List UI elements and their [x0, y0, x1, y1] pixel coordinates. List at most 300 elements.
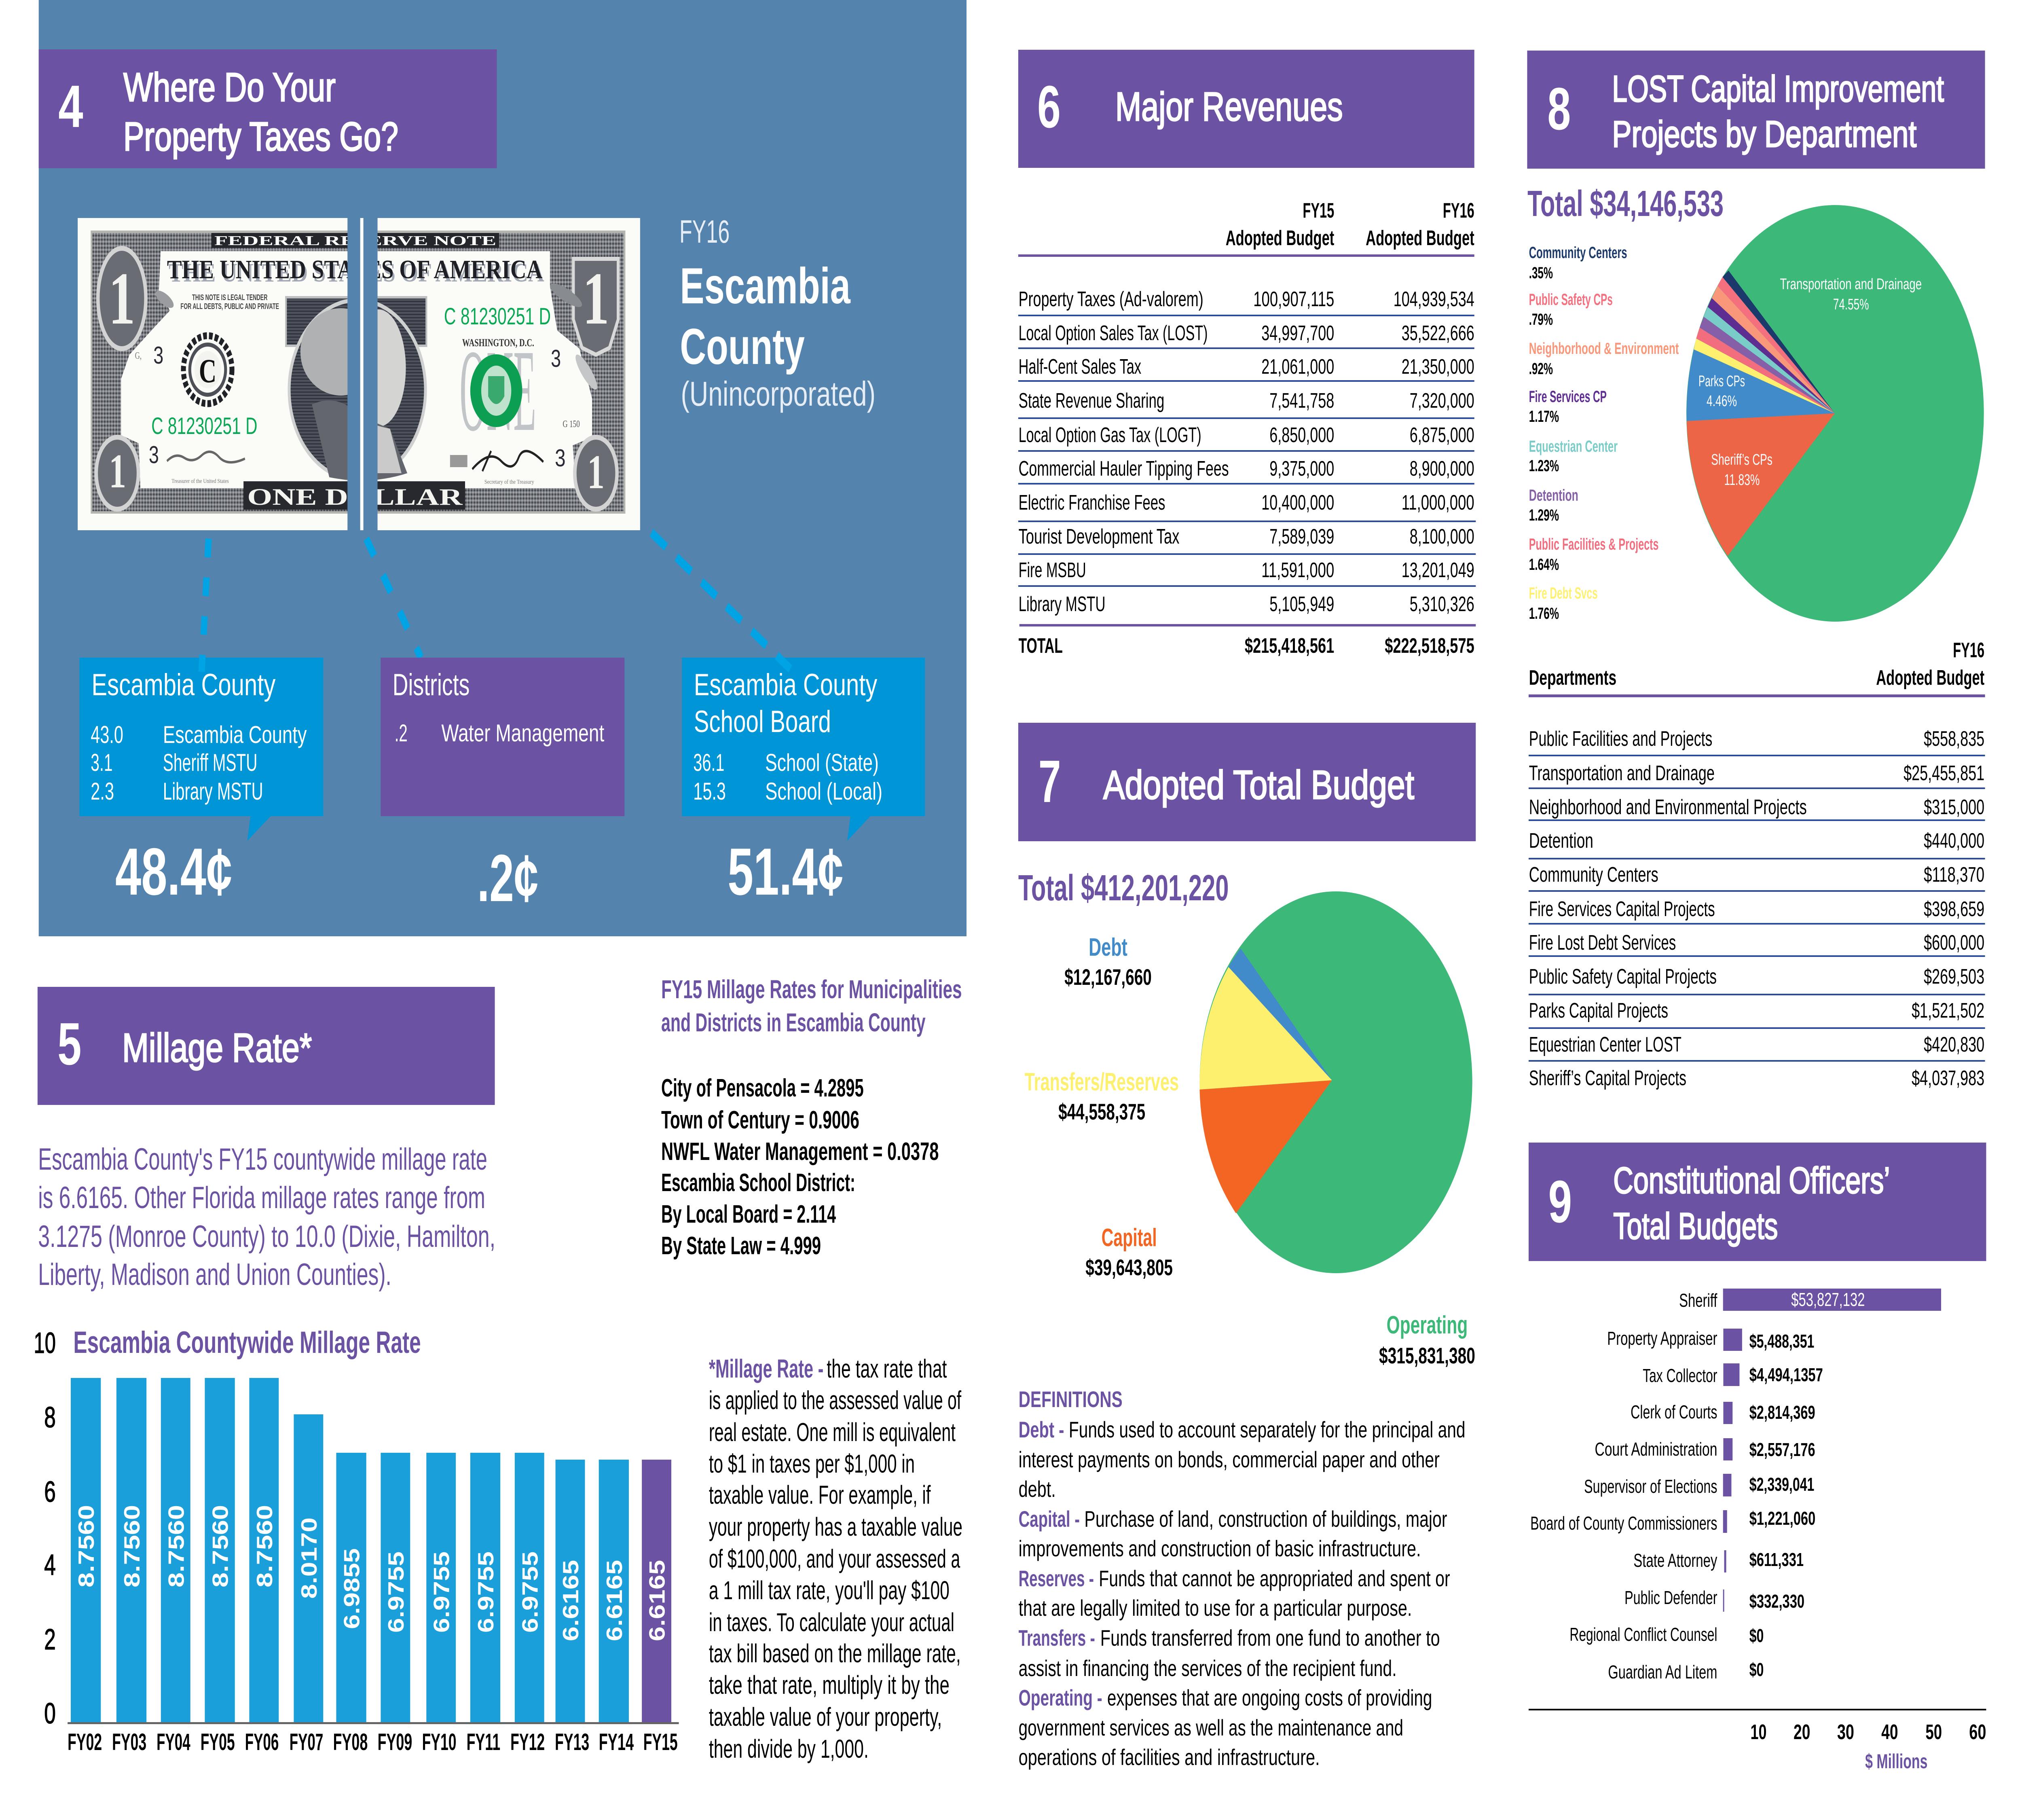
- pie labels: adopted total budget: $315,831,380: [1379, 1344, 1475, 1369]
- text block: millage rate definition: a 1 mill tax rate, you'll pay $100: [709, 1576, 950, 1605]
- text block: definitions: Transfers -: [1019, 1626, 1095, 1651]
- legend: LOST departments: Community Centers: [1529, 244, 1627, 262]
- table rows: $558,835: [1924, 727, 1984, 751]
- heading: section 7 adopted total budget: Adopted Total Budget: [1103, 762, 1414, 808]
- callout: Escambia County: Library MSTU: [163, 778, 263, 805]
- text block: FY15 municipal millage rates: City of Pensacola = 4.2895: [661, 1074, 864, 1102]
- seal: Federal Reserve: C: [199, 352, 216, 389]
- callout: Escambia County: Escambia County: [163, 722, 307, 749]
- table header: FY15: [1303, 199, 1334, 222]
- legend: LOST departments: .35%: [1529, 264, 1553, 282]
- table rows: Property Taxes (Ad-valorem): [1019, 287, 1203, 311]
- text block: FY15 municipal millage rates: Town of Century = 0.9006: [661, 1106, 859, 1134]
- table rows: 10,400,000: [1261, 491, 1334, 514]
- row labels: Guardian Ad Litem: [1608, 1662, 1717, 1682]
- x axis labels: FY08: [333, 1729, 368, 1755]
- table rows: State Revenue Sharing: [1019, 389, 1164, 413]
- text block: millage intro: is 6.6165. Other Florida millage rates range from: [38, 1180, 485, 1215]
- bar values: $332,330: [1749, 1591, 1804, 1612]
- illustration: split one dollar bill: 3: [555, 445, 566, 472]
- text block: definitions: DEFINITIONS: [1019, 1387, 1123, 1412]
- illustration: split one dollar bill: 1: [583, 257, 609, 340]
- table rows: $4,037,983: [1912, 1066, 1984, 1090]
- legend: LOST departments: Neighborhood & Environment: [1529, 340, 1679, 358]
- callout: Districts: .2: [395, 720, 408, 747]
- text block: definitions: Debt -: [1019, 1418, 1064, 1443]
- y axis labels: 8: [44, 1401, 56, 1434]
- text block: definitions: Reserves -: [1019, 1566, 1094, 1591]
- y axis labels: 2: [44, 1623, 56, 1656]
- text block: FY15 municipal millage rates: and Districts in Escambia County: [661, 1008, 926, 1037]
- illustration: split one dollar bill: 3: [551, 345, 561, 372]
- callout: Escambia County School Board: School (State): [765, 749, 879, 777]
- text block: FY16 Escambia County: County: [680, 319, 805, 375]
- x axis labels: FY03: [112, 1729, 146, 1755]
- x axis labels: FY07: [290, 1729, 323, 1755]
- table rows: [1529, 727, 1984, 1090]
- chart title: Escambia Countywide Millage Rate: Escambia Countywide Millage Rate: [73, 1325, 421, 1359]
- table rows: Library MSTU: [1019, 592, 1106, 616]
- table rows: $118,370: [1924, 863, 1984, 887]
- illustration: split one dollar bill: FOR ALL DEBTS, PUBLIC AND PRIVATE: [180, 302, 279, 311]
- table: LOST departments: [1529, 638, 1985, 1090]
- heading: section 8 LOST capital improvement: 8: [1547, 76, 1571, 142]
- text block: millage intro: Liberty, Madison and Union Counties).: [38, 1257, 391, 1291]
- legend: LOST departments: Fire Debt Svcs: [1529, 584, 1598, 602]
- table rows: 21,061,000: [1261, 355, 1334, 379]
- bar values: $53,827,132: [1791, 1290, 1865, 1310]
- bar value labels: 6.6165: [645, 1560, 669, 1641]
- pie labels: adopted total budget: [1025, 933, 1475, 1369]
- table rows: Fire Lost Debt Services: [1529, 931, 1676, 954]
- pie labels: 4.46%: [1707, 392, 1737, 409]
- callout: Escambia County School Board: 15.3: [693, 778, 726, 805]
- text block: definitions: government services as well as the maintenance and: [1019, 1716, 1403, 1741]
- value: 48.4 cents: 48.4¢: [115, 835, 232, 909]
- pie chart: adopted total budget: [1199, 891, 1472, 1273]
- table rows: 7,589,039: [1269, 525, 1334, 548]
- text block: millage intro: [38, 1142, 495, 1291]
- bar value labels: [74, 1505, 669, 1641]
- heading: section 5 millage rate: Millage Rate*: [122, 1025, 312, 1071]
- text block: millage rate definition: take that rate, multiply it by the: [709, 1670, 950, 1699]
- bars: [1723, 1289, 1941, 1612]
- table rows: $420,830: [1924, 1033, 1984, 1056]
- illustration: split one dollar bill: Treasurer of the United States: [171, 477, 229, 484]
- callout: Escambia County: 2.3: [91, 778, 114, 805]
- axis ticks: [1751, 1720, 1986, 1744]
- illustration: split one dollar bill: G,: [135, 350, 142, 361]
- table rows: 6,850,000: [1269, 423, 1334, 447]
- table rows: 9,375,000: [1269, 457, 1334, 480]
- table rows: $222,518,575: [1385, 634, 1474, 658]
- heading: section 7 adopted total budget: [1018, 723, 1476, 841]
- illustration: split one dollar bill: Secretary of the Treasury: [484, 478, 534, 485]
- illustration: split one dollar bill: 1: [108, 257, 135, 340]
- illustration: split one dollar bill: 1: [109, 444, 126, 498]
- table rows: Detention: [1529, 829, 1593, 853]
- heading: section 9 constitutional officers: Constitutional Officers’: [1613, 1160, 1890, 1201]
- table rows: 7,320,000: [1410, 389, 1474, 413]
- x axis labels: FY11: [467, 1729, 500, 1755]
- x axis labels: FY02: [68, 1729, 102, 1755]
- text block: FY15 municipal millage rates: NWFL Water Management = 0.0378: [661, 1138, 939, 1166]
- table rows: $440,000: [1924, 829, 1984, 853]
- text block: millage intro: Escambia County's FY15 countywide millage rate: [38, 1142, 487, 1176]
- text block: definitions: Purchase of land, construction of buildings, major: [1084, 1507, 1447, 1532]
- table rows: $1,521,502: [1912, 999, 1984, 1022]
- pie labels: adopted total budget: Debt: [1089, 933, 1127, 961]
- row labels: Public Defender: [1624, 1588, 1717, 1608]
- bar value labels: 8.7560: [120, 1505, 144, 1587]
- bars: [71, 1378, 671, 1723]
- text block: FY15 municipal millage rates: By State Law = 4.999: [661, 1232, 821, 1260]
- illustration: split one dollar bill: ONE: [459, 325, 536, 455]
- table rows: 11,000,000: [1402, 491, 1474, 514]
- table rows: $269,503: [1924, 965, 1984, 988]
- illustration: split one dollar bill: THIS NOTE IS LEGAL TENDER: [192, 293, 268, 302]
- y axis labels: 4: [44, 1549, 56, 1581]
- illustration: split one dollar bill: FEDERAL RESERVE NOTE: [214, 233, 496, 248]
- bar values: [1749, 1290, 1865, 1680]
- heading: section 8 LOST capital improvement: Projects by Department: [1612, 113, 1916, 155]
- table rows: 7,541,758: [1269, 389, 1334, 413]
- pie labels: 11.83%: [1724, 471, 1760, 488]
- illustration: split one dollar bill: C 81230251 D: [444, 303, 551, 330]
- text block: millage rate definition: taxable value. For example, if: [709, 1480, 931, 1509]
- callout: Escambia County School Board: School (Local): [765, 778, 882, 805]
- table rows: 34,997,700: [1261, 321, 1334, 345]
- text block: FY16 Escambia County: [679, 214, 876, 413]
- total: adopted budget: Total $412,201,220: [1018, 867, 1229, 908]
- bar value labels: 8.7560: [252, 1505, 277, 1587]
- pie labels: adopted total budget: Transfers/Reserves: [1025, 1068, 1179, 1096]
- callout: Districts: Districts: [393, 667, 470, 702]
- text block: FY15 municipal millage rates: Escambia School District:: [661, 1169, 855, 1197]
- y axis labels: 6: [44, 1476, 56, 1508]
- text block: FY16 Escambia County: Escambia: [680, 258, 851, 315]
- callout: Escambia County: 43.0: [91, 722, 123, 749]
- value: .2 cents: .2¢: [477, 841, 538, 916]
- table rows: $215,418,561: [1245, 634, 1334, 658]
- row labels: Sheriff: [1679, 1291, 1717, 1311]
- illustration: split one dollar bill: 3: [149, 442, 159, 469]
- bar chart: constitutional officers budgets: [1529, 1289, 1986, 1773]
- axis ticks: 30: [1837, 1720, 1854, 1744]
- panel: where do your property taxes go: [39, 0, 967, 936]
- text block: definitions: improvements and construction of basic infrastructure.: [1019, 1536, 1421, 1562]
- illustration: split one dollar bill: [78, 218, 640, 530]
- x axis labels: FY13: [555, 1729, 589, 1755]
- heading: section 9 constitutional officers: 9: [1548, 1169, 1572, 1235]
- bar value labels: 6.6165: [602, 1560, 626, 1641]
- text block: definitions: Funds that cannot be appropriated and spent or: [1099, 1566, 1450, 1591]
- text block: millage rate definition: the tax rate that: [827, 1354, 947, 1383]
- heading: section 6 major revenues: [1018, 50, 1474, 168]
- callout: Escambia County: 3.1: [91, 749, 113, 777]
- table rows: 11,591,000: [1261, 558, 1334, 582]
- table rows: 13,201,049: [1402, 558, 1474, 582]
- pie labels: adopted total budget: $12,167,660: [1064, 965, 1152, 990]
- bar values: $4,494,1357: [1749, 1365, 1823, 1385]
- callout: Escambia County: Escambia County: [91, 667, 275, 702]
- table rows: Tourist Development Tax: [1019, 525, 1180, 548]
- callout: Escambia County School Board: 36.1: [693, 749, 724, 777]
- heading: section 9 constitutional officers: [1529, 1143, 1986, 1261]
- table rows: Public Facilities and Projects: [1529, 727, 1712, 751]
- callout: Escambia County School Board: [682, 658, 925, 841]
- x axis labels: FY10: [422, 1729, 457, 1755]
- bar value labels: 6.9755: [518, 1551, 542, 1633]
- x axis labels: FY15: [643, 1729, 678, 1755]
- table rows: Fire Services Capital Projects: [1529, 897, 1715, 921]
- text block: definitions: that are legally limited to use for a particular purpose.: [1019, 1596, 1412, 1621]
- bar values: $2,339,041: [1749, 1475, 1814, 1495]
- arrow: dashed line to Escambia County: [202, 539, 209, 672]
- table rows: 100,907,115: [1253, 287, 1334, 311]
- heading: section 4: Property Taxes Go?: [123, 114, 398, 159]
- text block: FY15 municipal millage rates: [661, 975, 962, 1260]
- bar values: $0: [1749, 1626, 1764, 1646]
- text block: millage rate definition: tax bill based on the millage rate,: [709, 1639, 961, 1668]
- callout: Districts: [381, 658, 624, 816]
- table rows: Parks Capital Projects: [1529, 999, 1668, 1022]
- text block: millage rate definition: *Millage Rate -: [709, 1354, 823, 1383]
- illustration: split one dollar bill: 3: [153, 342, 163, 369]
- table rows: Equestrian Center LOST: [1529, 1033, 1681, 1056]
- table rows: [1019, 287, 1474, 658]
- table rows: 104,939,534: [1394, 287, 1474, 311]
- x axis labels: FY14: [599, 1729, 634, 1755]
- illustration: split one dollar bill: G 150: [563, 418, 580, 430]
- pie labels: Sheriff’s CPs: [1711, 451, 1772, 468]
- illustration: split one dollar bill: C 81230251 D: [151, 413, 257, 439]
- table header: Adopted Budget: [1226, 226, 1334, 250]
- legend: LOST departments: .92%: [1529, 360, 1553, 378]
- table header: FY16: [1443, 199, 1474, 222]
- illustration: split one dollar bill: THE UNITED STATES OF AMERICA: [169, 258, 544, 288]
- text block: definitions: interest payments on bonds, commercial paper and other: [1019, 1448, 1440, 1473]
- text block: millage rate definition: real estate. One mill is equivalent: [709, 1418, 956, 1447]
- legend: LOST departments: 1.17%: [1529, 408, 1559, 425]
- table rows: Commercial Hauler Tipping Fees: [1019, 457, 1229, 480]
- seal: Treasury: [470, 354, 522, 427]
- axis ticks: 20: [1794, 1720, 1810, 1744]
- text block: definitions: Funds used to account separately for the principal and: [1069, 1418, 1466, 1443]
- row labels: Tax Collector: [1643, 1366, 1717, 1386]
- table rows: Fire MSBU: [1019, 558, 1086, 582]
- y axis labels: 10: [34, 1327, 56, 1359]
- bar values: $611,331: [1749, 1550, 1804, 1570]
- heading: section 6 major revenues: 6: [1037, 74, 1061, 140]
- legend: LOST departments: 1.29%: [1529, 506, 1559, 524]
- bar value labels: 8.7560: [74, 1505, 99, 1587]
- table header: FY16: [1953, 638, 1984, 662]
- callout: Escambia County School Board: School Board: [694, 704, 831, 739]
- axis unit label: $ Millions: [1865, 1750, 1927, 1773]
- text block: millage rate definition: in taxes. To calculate your actual: [709, 1608, 954, 1637]
- pie labels: adopted total budget: $44,558,375: [1058, 1100, 1145, 1125]
- table rows: Sheriff’s Capital Projects: [1529, 1066, 1686, 1090]
- table rows: $315,000: [1924, 795, 1984, 819]
- text block: FY16 Escambia County: (Unincorporated): [681, 375, 876, 413]
- bar chart: countywide millage rate: [34, 1327, 679, 1755]
- text block: definitions: expenses that are ongoing costs of providing: [1107, 1686, 1432, 1711]
- x axis labels: [68, 1729, 678, 1755]
- bar value labels: 6.9755: [429, 1551, 454, 1633]
- table rows: Community Centers: [1529, 863, 1658, 887]
- callout: Escambia County: Sheriff MSTU: [163, 749, 257, 777]
- bar value labels: 8.7560: [164, 1505, 188, 1587]
- row labels: [1530, 1291, 1717, 1682]
- divider: gap splitting the bill: [347, 218, 378, 532]
- table rows: Local Option Gas Tax (LOGT): [1019, 423, 1201, 447]
- value: 51.4 cents: 51.4¢: [728, 835, 844, 909]
- bar values: $1,221,060: [1749, 1509, 1815, 1529]
- table rows: Electric Franchise Fees: [1019, 491, 1165, 514]
- table rows: Public Safety Capital Projects: [1529, 965, 1717, 988]
- table header: [1018, 199, 1474, 257]
- text block: definitions: [1019, 1387, 1466, 1770]
- heading: section 4: [39, 49, 497, 168]
- table rows: Transportation and Drainage: [1529, 761, 1715, 785]
- bar value labels: 8.7560: [208, 1505, 233, 1587]
- x axis labels: FY12: [510, 1729, 545, 1755]
- portrait: George Washington: [286, 297, 426, 480]
- arrow: dashed line to School Board: [651, 533, 790, 669]
- bar values: $5,488,351: [1749, 1331, 1814, 1352]
- table rows: 21,350,000: [1402, 355, 1474, 379]
- row labels: Clerk of Courts: [1631, 1402, 1717, 1422]
- text block: millage rate definition: then divide by 1,000.: [709, 1734, 869, 1763]
- table header: [1529, 638, 1985, 697]
- text block: definitions: assist in financing the services of the recipient fund.: [1019, 1656, 1397, 1681]
- table header: Adopted Budget: [1876, 666, 1984, 690]
- heading: section 6 major revenues: Major Revenues: [1115, 84, 1343, 129]
- text block: FY15 municipal millage rates: By Local Board = 2.114: [661, 1200, 836, 1228]
- pie labels: adopted total budget: $39,643,805: [1085, 1255, 1173, 1280]
- text block: FY15 municipal millage rates: FY15 Millage Rates for Municipalities: [661, 975, 962, 1004]
- axis ticks: 50: [1925, 1720, 1942, 1744]
- legend: LOST departments: Detention: [1529, 487, 1578, 504]
- table rows: TOTAL: [1019, 634, 1063, 658]
- row labels: Court Administration: [1595, 1439, 1717, 1460]
- axis ticks: 40: [1881, 1720, 1898, 1744]
- legend: LOST departments: Fire Services CP: [1529, 388, 1607, 406]
- x axis labels: FY05: [201, 1729, 235, 1755]
- text block: FY16 Escambia County: FY16: [679, 214, 730, 250]
- heading: section 5 millage rate: [38, 987, 495, 1105]
- y axis labels: 0: [44, 1697, 56, 1730]
- table rows: 5,105,949: [1269, 592, 1334, 616]
- bar values: $0: [1749, 1660, 1764, 1680]
- heading: section 4: Where Do Your: [123, 65, 336, 110]
- pie labels: adopted total budget: Capital: [1102, 1224, 1157, 1252]
- table rows: 8,100,000: [1410, 525, 1474, 548]
- text block: millage rate definition: is applied to the assessed value of: [709, 1386, 962, 1415]
- axis ticks: 10: [1751, 1720, 1767, 1744]
- text block: millage rate definition: to $1 in taxes per $1,000 in: [709, 1449, 915, 1478]
- y axis labels: [34, 1327, 56, 1730]
- text block: definitions: Capital -: [1019, 1507, 1080, 1532]
- row labels: Regional Conflict Counsel: [1569, 1625, 1717, 1645]
- x axis labels: FY06: [245, 1729, 279, 1755]
- table header: Adopted Budget: [1366, 226, 1474, 250]
- table rows: $398,659: [1924, 897, 1984, 921]
- heading: section 4: 4: [58, 74, 83, 140]
- table rows: 8,900,000: [1410, 457, 1474, 480]
- legend: LOST departments: 1.64%: [1529, 556, 1559, 574]
- row labels: Supervisor of Elections: [1584, 1477, 1717, 1497]
- callout: Escambia County: [79, 658, 323, 841]
- heading: section 7 adopted total budget: 7: [1038, 749, 1061, 815]
- row labels: Property Appraiser: [1607, 1329, 1717, 1349]
- pie labels: [1698, 275, 1922, 488]
- bar values: $2,557,176: [1749, 1440, 1815, 1460]
- illustration: split one dollar bill: 1: [587, 445, 605, 499]
- legend: LOST departments: Public Facilities & Projects: [1529, 535, 1658, 553]
- text block: definitions: Operating -: [1019, 1686, 1102, 1711]
- text block: definitions: operations of facilities and infrastructure.: [1019, 1745, 1320, 1770]
- table rows: $25,455,851: [1904, 761, 1984, 785]
- pie chart: LOST capital projects: [1686, 205, 1984, 622]
- legend: LOST departments: 1.76%: [1529, 605, 1559, 622]
- x axis labels: FY09: [378, 1729, 412, 1755]
- legend: LOST departments: 1.23%: [1529, 457, 1559, 475]
- heading: section 8 LOST capital improvement: [1527, 51, 1985, 169]
- bar value labels: 6.9755: [384, 1551, 408, 1633]
- callout: Escambia County School Board: Escambia County: [694, 667, 877, 702]
- pie labels: Parks CPs: [1698, 372, 1745, 389]
- pie labels: Transportation and Drainage: [1780, 275, 1922, 292]
- row labels: State Attorney: [1633, 1551, 1717, 1571]
- table rows: 5,310,326: [1410, 592, 1474, 616]
- text block: millage rate definition: your property has a taxable value: [709, 1512, 962, 1541]
- arrow: dashed line to districts: [366, 539, 421, 658]
- text block: definitions: debt.: [1019, 1477, 1056, 1502]
- illustration: split one dollar bill: ONE DOLLAR: [247, 484, 463, 510]
- legend: LOST departments: Equestrian Center: [1529, 438, 1618, 455]
- illustration: split one dollar bill: WASHINGTON, D.C.: [462, 337, 534, 349]
- bar value labels: 6.9755: [474, 1551, 498, 1633]
- x axis labels: FY04: [157, 1729, 190, 1755]
- pie labels: 74.55%: [1833, 295, 1869, 313]
- bar value labels: 6.9855: [339, 1548, 364, 1629]
- illustration: split one dollar bill: THE UNITED STATES OF AMERICA: [167, 255, 542, 284]
- table rows: 35,522,666: [1402, 321, 1474, 345]
- heading: section 5 millage rate: 5: [57, 1011, 81, 1077]
- axis ticks: 60: [1969, 1720, 1986, 1744]
- text block: millage intro: 3.1275 (Monroe County) to 10.0 (Dixie, Hamilton,: [38, 1219, 495, 1253]
- text block: millage rate definition: [709, 1354, 962, 1763]
- table rows: 6,875,000: [1410, 423, 1474, 447]
- text block: millage rate definition: taxable value of your property,: [709, 1702, 942, 1731]
- legend: LOST departments: .79%: [1529, 311, 1553, 328]
- bar value labels: 8.0170: [297, 1517, 321, 1599]
- legend: LOST departments: Public Safety CPs: [1529, 291, 1613, 309]
- total: LOST capital: Total $34,146,533: [1527, 183, 1724, 224]
- pie labels: adopted total budget: Operating: [1387, 1311, 1468, 1339]
- heading: section 9 constitutional officers: Total Budgets: [1613, 1205, 1778, 1247]
- table rows: $600,000: [1924, 931, 1984, 954]
- text block: millage rate definition: of $100,000, and your assessed a: [709, 1544, 960, 1573]
- row labels: Board of County Commissioners: [1530, 1513, 1717, 1534]
- legend: LOST departments: [1529, 244, 1679, 622]
- table header: Departments: [1529, 666, 1616, 690]
- table rows: Half-Cent Sales Tax: [1019, 355, 1141, 379]
- heading: section 8 LOST capital improvement: LOST Capital Improvement: [1612, 68, 1944, 110]
- table rows: Local Option Sales Tax (LOST): [1019, 321, 1208, 345]
